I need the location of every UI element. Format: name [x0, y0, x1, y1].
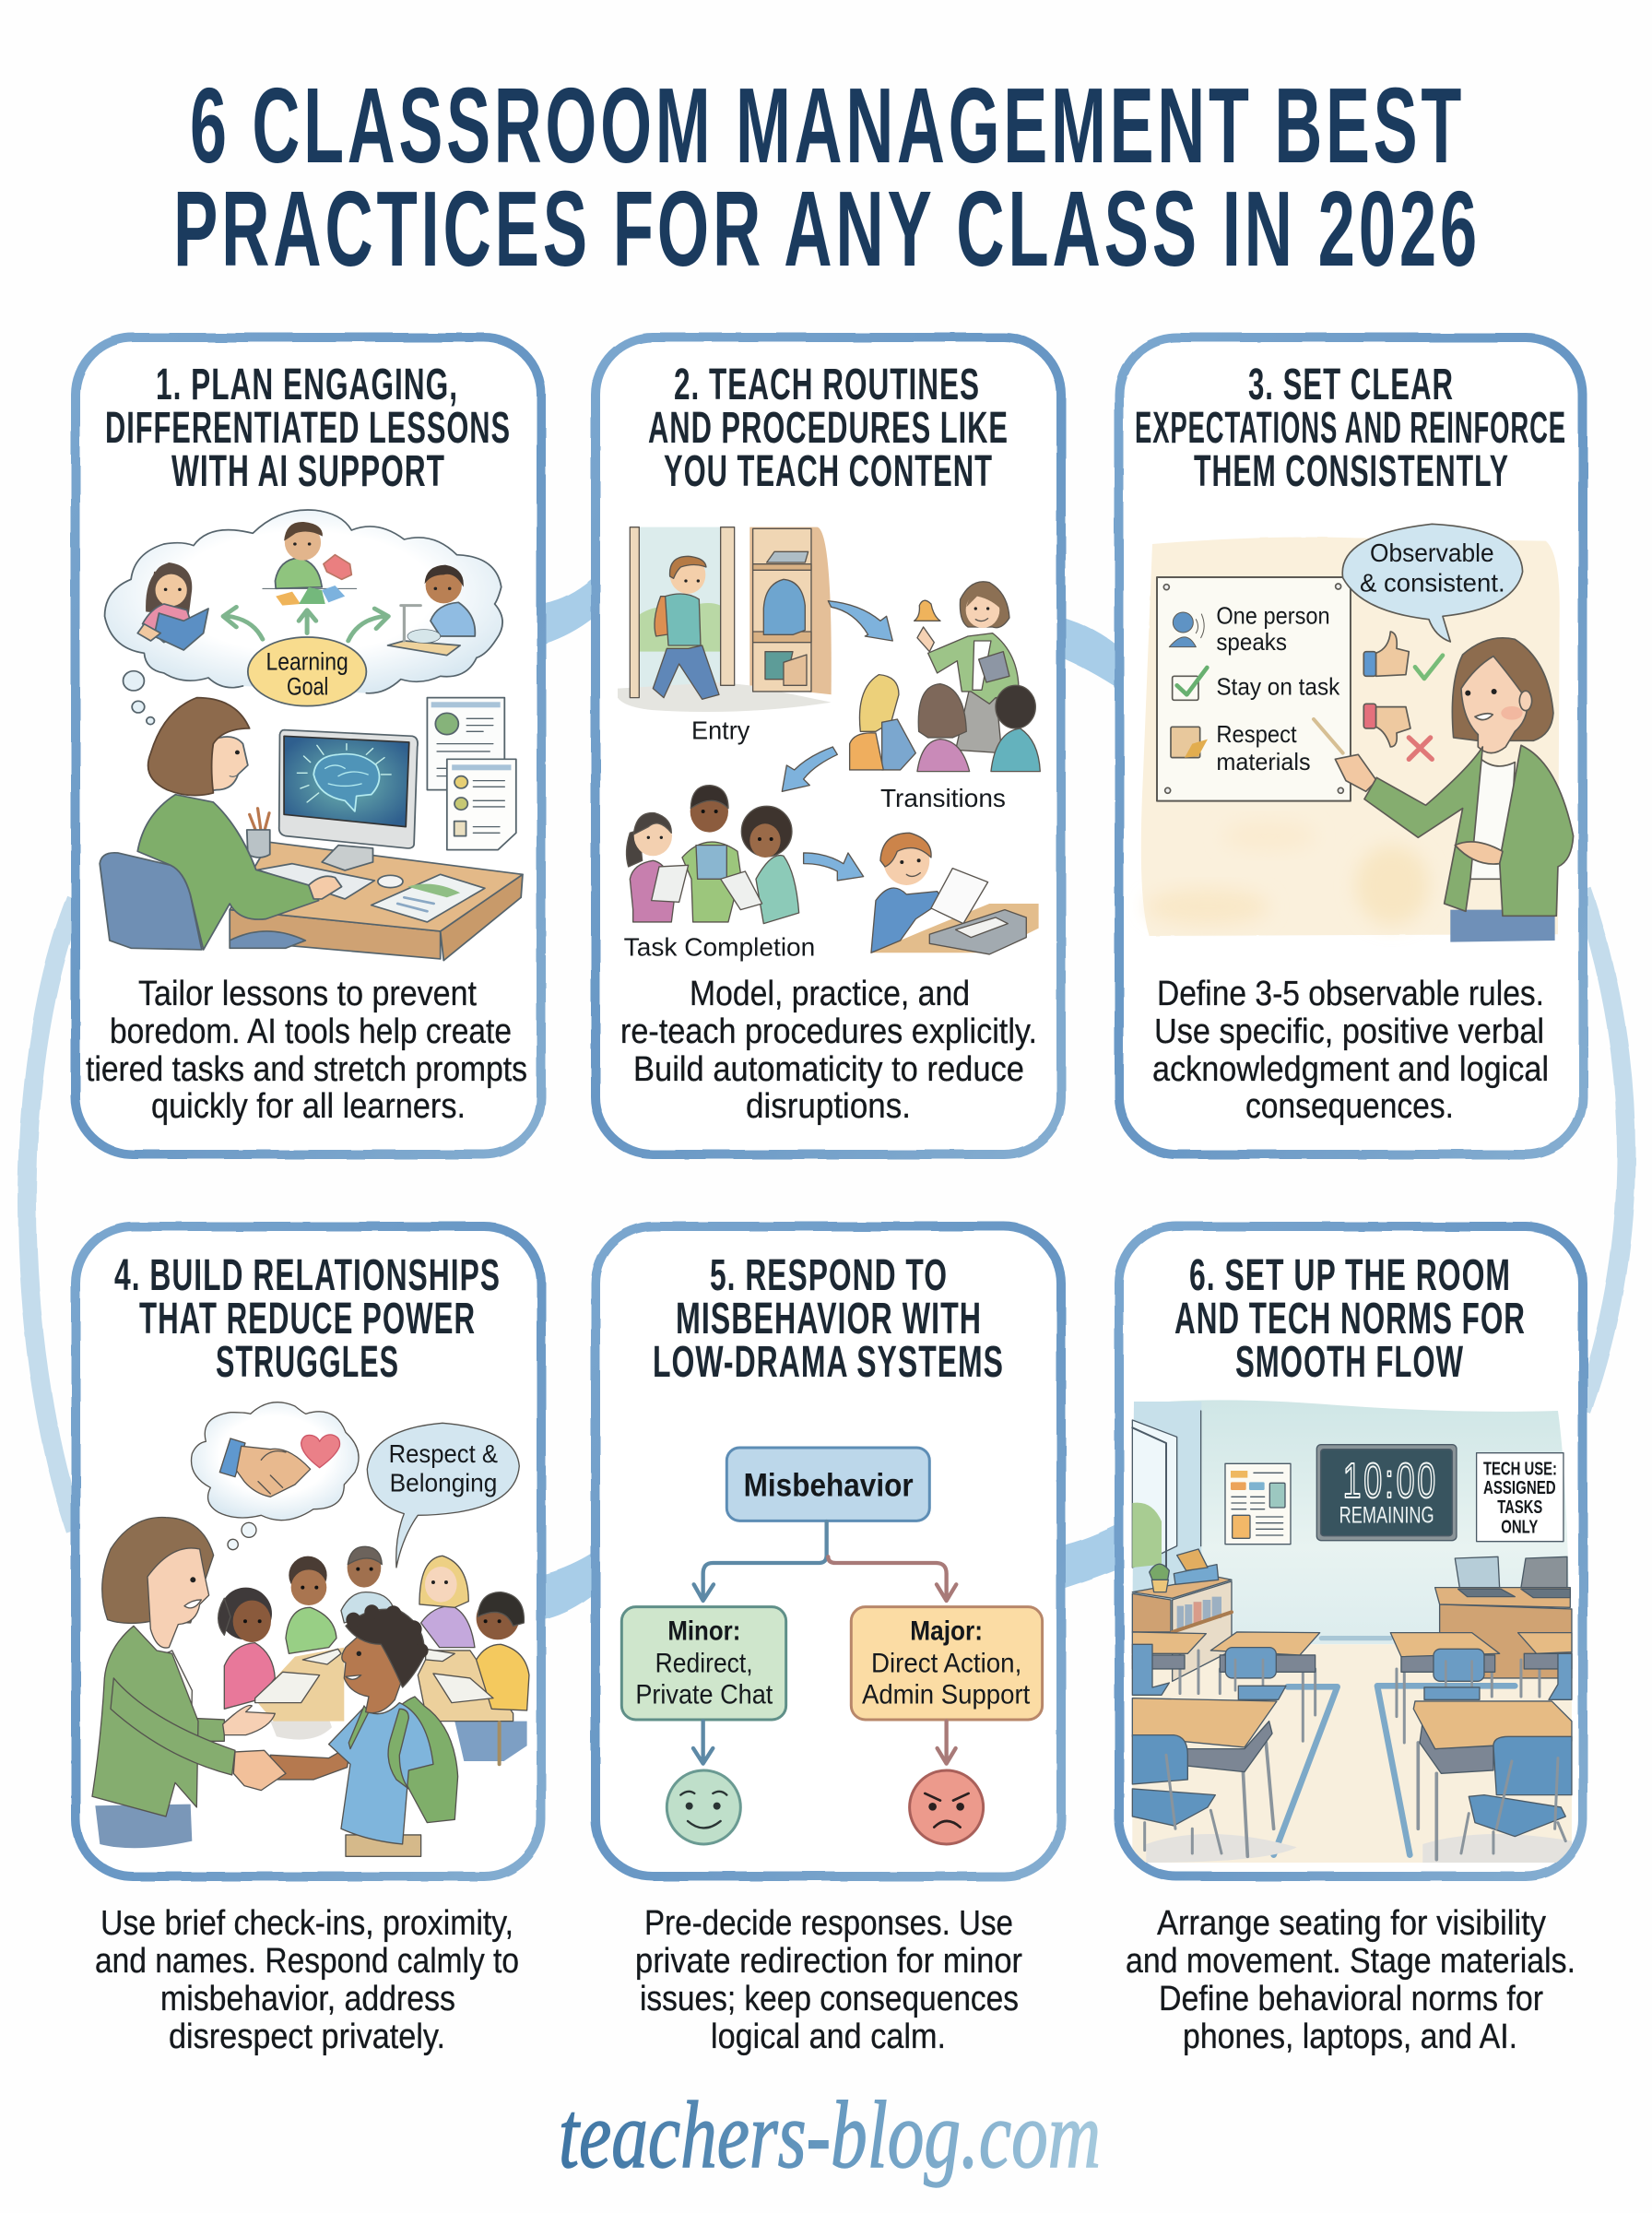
- teacher: [92, 1518, 275, 1848]
- thought cloud with handshake and heart: [191, 1402, 359, 1550]
- front row desks and chairs: [1132, 1698, 1572, 1863]
- digital countdown timer: 10:00: [1343, 1454, 1438, 1509]
- speech bubble: & consistent.: [1360, 569, 1505, 598]
- panel 2 description: re-teach procedures explicitly.: [620, 1012, 1037, 1051]
- flow arrow 3: [804, 853, 864, 881]
- branch arrow to minor: [694, 1521, 827, 1601]
- panel 1: plan engaging lessons: [76, 337, 541, 1154]
- window: [1132, 1411, 1201, 1570]
- illustration: teacher greeting student: [92, 1402, 529, 1856]
- panel 1 description: quickly for all learners.: [151, 1087, 466, 1126]
- major box: Admin Support: [862, 1679, 1030, 1710]
- transitions label: Transitions: [880, 784, 1006, 812]
- digital countdown timer: REMAINING: [1339, 1503, 1434, 1529]
- students with papers: [627, 786, 799, 924]
- panel 2: teach routines: [596, 337, 1061, 1154]
- major box: Major:: [910, 1616, 983, 1647]
- arrow to angry face: [938, 1722, 956, 1764]
- entry label: Entry: [691, 716, 750, 745]
- wall and floor: [1132, 1400, 1572, 1863]
- floating documents: [427, 698, 516, 850]
- title: [173, 65, 1481, 289]
- icon: thumbs down with cross: [1363, 704, 1432, 759]
- tech use sign: [1477, 1453, 1564, 1542]
- pencil cup: [247, 809, 270, 858]
- wall poster: [1225, 1463, 1291, 1544]
- desk: [230, 842, 523, 961]
- panel 4 description: misbehavior, address: [160, 1980, 455, 2018]
- back row desks and chairs: [1132, 1632, 1572, 1743]
- icon: happy face: [667, 1770, 740, 1844]
- green arrows from learning goal: [223, 607, 388, 641]
- laptops on back table: [1435, 1556, 1572, 1678]
- panel 6 heading: SMOOTH FLOW: [1235, 1338, 1464, 1387]
- panel 4 description: [95, 1904, 519, 2056]
- entry scene: [618, 527, 832, 712]
- panel 2 heading: AND PROCEDURES LIKE: [648, 404, 1009, 453]
- panel 6 description: Define behavioral norms for: [1159, 1980, 1543, 2018]
- rules poster: Respect: [1216, 720, 1297, 748]
- student with green backpack shaking hands: [233, 1604, 458, 1856]
- illustration: teacher pointing at rules poster: [1141, 524, 1574, 942]
- minor box: Minor:: [667, 1616, 740, 1647]
- panel 3 heading: [1135, 361, 1566, 496]
- icon: thumbs up with check: [1363, 632, 1443, 679]
- tech use sign: TASKS: [1497, 1497, 1542, 1518]
- footer website wordmark: teachers-blog.com: [559, 2082, 1101, 2188]
- panel 3 description: Use specific, positive verbal: [1154, 1012, 1544, 1051]
- panel 5 heading: 5. RESPOND TO: [710, 1251, 948, 1300]
- speech bubble: Respect &: [389, 1439, 498, 1468]
- students at tables: [218, 1546, 529, 1764]
- learning goal oval: Goal: [287, 672, 328, 700]
- panel 6 frame: [1119, 1226, 1583, 1876]
- panel 1 description: boredom. AI tools help create: [110, 1012, 512, 1051]
- panel 1 description: [86, 975, 527, 1126]
- misbehavior box: [726, 1448, 929, 1521]
- boy walking in: [653, 556, 719, 699]
- teacher with bell: [914, 582, 1019, 753]
- thought bubbles: [124, 671, 154, 725]
- keyboard, mouse and clipboard: [258, 864, 485, 922]
- illustration: classroom: [1132, 1400, 1572, 1863]
- speech bubble: Belonging: [390, 1469, 497, 1497]
- panel 1 heading: WITH AI SUPPORT: [171, 447, 445, 496]
- baseboard and floor tape: [1274, 1639, 1515, 1855]
- icon: clipboard and key: [1171, 727, 1208, 758]
- panel 6 heading: [1174, 1251, 1526, 1387]
- flowchart: [621, 1448, 1043, 1844]
- learning goal oval: [248, 637, 366, 706]
- rules poster: One person: [1216, 602, 1330, 630]
- panel 1 heading: DIFFERENTIATED LESSONS: [105, 404, 511, 453]
- panel 5 heading: MISBEHAVIOR WITH: [676, 1295, 982, 1343]
- tech use sign: TECH USE:: [1483, 1458, 1557, 1479]
- panel 3: clear expectations: [1119, 337, 1583, 1154]
- bookshelf with plant and bin: [1132, 1549, 1232, 1681]
- panel 3 description: [1152, 975, 1549, 1126]
- speech bubble: Observable: [1370, 538, 1494, 567]
- major box: [851, 1607, 1043, 1720]
- panel 5 description: private redirection for minor: [635, 1942, 1022, 1981]
- panel 1 description: tiered tasks and stretch prompts: [86, 1050, 527, 1089]
- teacher pointing: [1314, 638, 1574, 942]
- panel 4 heading: THAT REDUCE POWER: [139, 1295, 476, 1343]
- panel 1 description: Tailor lessons to prevent: [138, 975, 477, 1013]
- panel 6 description: phones, laptops, and AI.: [1183, 2018, 1517, 2056]
- panel 4 description: and names. Respond calmly to: [95, 1942, 519, 1981]
- thought cloud: [105, 510, 502, 693]
- icon: angry face: [910, 1770, 984, 1844]
- panel 2 description: [620, 975, 1037, 1126]
- rules poster: [1157, 577, 1351, 801]
- flow arrow 1: [828, 601, 892, 641]
- panel 2 heading: YOU TEACH CONTENT: [664, 447, 993, 496]
- rules poster: Stay on task: [1216, 672, 1340, 700]
- panel 2 heading: 2. TEACH ROUTINES: [674, 361, 980, 409]
- panel 2 heading: [648, 361, 1009, 496]
- panel 5 heading: LOW-DRAMA SYSTEMS: [653, 1338, 1004, 1387]
- students listening: [850, 675, 1040, 772]
- watercolor wall wash: [1141, 537, 1560, 936]
- panel 2 description: disruptions.: [746, 1087, 911, 1126]
- teacher seen from the side: [137, 698, 342, 950]
- panel 5 description: [635, 1904, 1022, 2056]
- computer monitor with brain: [279, 730, 418, 870]
- student handing in work: [871, 833, 1039, 954]
- panel 3 description: Define 3-5 observable rules.: [1157, 975, 1544, 1013]
- child building: [388, 565, 475, 656]
- illustration: routine sequence: [618, 527, 1040, 962]
- panel 4 heading: STRUGGLES: [216, 1338, 399, 1387]
- panel 2 frame: [596, 337, 1061, 1154]
- panel 3 description: acknowledgment and logical: [1152, 1050, 1549, 1089]
- child reading: [137, 562, 208, 650]
- arrow to happy face: [693, 1722, 713, 1764]
- panel 6 description: and movement. Stage materials.: [1126, 1942, 1575, 1981]
- speech bubble: [367, 1423, 519, 1568]
- tech use sign: ASSIGNED: [1483, 1477, 1556, 1498]
- child with puzzle: [263, 522, 357, 606]
- speech bubble: [1342, 524, 1523, 642]
- panel 5 description: issues; keep consequences: [640, 1980, 1019, 2018]
- minor box: [621, 1607, 786, 1720]
- panel 3 frame: [1119, 337, 1583, 1154]
- panel 1 heading: [105, 361, 511, 496]
- task completion label: Task Completion: [624, 933, 815, 962]
- panel 1 heading: 1. PLAN ENGAGING,: [156, 361, 458, 409]
- panel 4 heading: 4. BUILD RELATIONSHIPS: [114, 1251, 501, 1300]
- major box: Direct Action,: [871, 1648, 1021, 1678]
- rules poster: speaks: [1216, 628, 1287, 656]
- rules poster: materials: [1216, 748, 1311, 775]
- digital countdown timer: [1316, 1445, 1457, 1541]
- tech use sign: ONLY: [1501, 1516, 1538, 1537]
- panel 3 description: consequences.: [1245, 1087, 1454, 1126]
- panel 4 description: Use brief check-ins, proximity,: [100, 1904, 513, 1943]
- minor box: Private Chat: [635, 1679, 773, 1710]
- panel 6 description: Arrange seating for visibility: [1157, 1904, 1546, 1943]
- panel 4 description: disrespect privately.: [169, 2018, 445, 2056]
- panel 6: room and tech norms: [1119, 1226, 1583, 2056]
- panel 3 heading: 3. SET CLEAR: [1248, 361, 1454, 409]
- panel 2 description: Build automaticity to reduce: [633, 1050, 1024, 1089]
- learning goal oval: Learning: [266, 648, 348, 675]
- panel 5 heading: [653, 1251, 1004, 1387]
- panel 5: low-drama systems: [596, 1226, 1061, 2056]
- connector ribbons between panels: [28, 572, 1626, 1620]
- icon: check box: [1173, 668, 1207, 700]
- panel 4: build relationships: [76, 1226, 541, 2056]
- minor box: Redirect,: [655, 1648, 753, 1678]
- panel 4 frame: [76, 1226, 541, 1876]
- panel 4 heading: [114, 1251, 501, 1387]
- misbehavior box: Misbehavior: [744, 1468, 914, 1504]
- panel 2 description: Model, practice, and: [690, 975, 970, 1013]
- panel 5 description: logical and calm.: [711, 2018, 946, 2056]
- illustration: teacher at computer with thought cloud: [100, 510, 523, 961]
- teacher chair: [100, 853, 202, 950]
- panel 1 frame: [76, 337, 541, 1154]
- panel 6 description: [1126, 1904, 1575, 2056]
- flow arrow 2: [782, 747, 837, 791]
- branch arrow to major: [828, 1556, 956, 1601]
- panel 5 description: Pre-decide responses. Use: [644, 1904, 1013, 1943]
- panel 5 frame: [596, 1226, 1061, 1876]
- icon: speaking person: [1169, 612, 1204, 647]
